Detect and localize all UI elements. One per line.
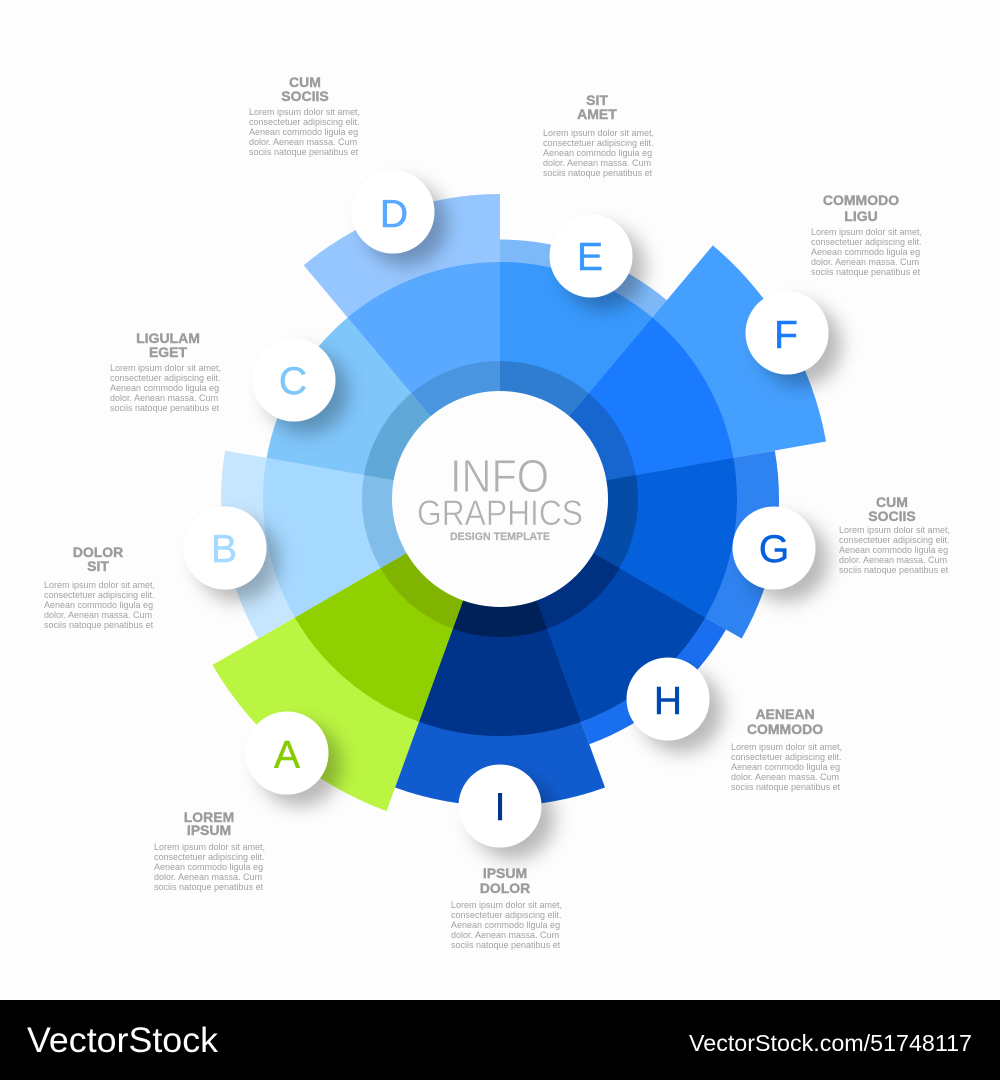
- badge D: [352, 170, 434, 254]
- text block: A lorem ipsum: IPSUM: [187, 822, 231, 838]
- text block: C ligulam eget: dolor. Aenean massa. Cum: [110, 393, 218, 403]
- text block: B dolor sit: consectetuer adipiscing elit.: [44, 590, 155, 600]
- wedge A: [212, 499, 500, 811]
- text block: D cum sociis: dolor. Aenean massa. Cum: [249, 137, 357, 147]
- text block: I ipsum dolor: DOLOR: [480, 880, 530, 896]
- wedge I: [395, 499, 605, 806]
- wedge H: [500, 499, 726, 744]
- text block: F commodo ligu: COMMODO: [823, 192, 899, 208]
- text block: I ipsum dolor: [451, 865, 562, 950]
- text block: D cum sociis: CUM: [289, 74, 321, 90]
- badge D: D: [380, 193, 408, 236]
- text block: F commodo ligu: dolor. Aenean massa. Cum: [811, 257, 919, 267]
- wedge B: [221, 451, 500, 638]
- text block: G cum sociis: SOCIIS: [868, 508, 916, 524]
- wedge E: [500, 239, 667, 499]
- badge I: I: [495, 786, 505, 829]
- text block: F commodo ligu: consectetuer adipiscing elit.: [811, 237, 922, 247]
- text block: A lorem ipsum: LOREM: [184, 809, 234, 825]
- wedge D: [304, 194, 500, 499]
- text block: A lorem ipsum: sociis natoque penatibus et: [154, 882, 264, 892]
- text block: E sit amet: Aenean commodo ligula eg: [543, 148, 652, 158]
- text block: A lorem ipsum: Aenean commodo ligula eg: [154, 862, 263, 872]
- text block: C ligulam eget: consectetuer adipiscing elit.: [110, 373, 221, 383]
- text block: C ligulam eget: Lorem ipsum dolor sit amet,: [110, 363, 221, 373]
- wedge C: [267, 318, 500, 499]
- text block: B dolor sit: [44, 544, 155, 630]
- radial segmented chart: [212, 194, 826, 811]
- text block: E sit amet: SIT: [586, 92, 608, 108]
- text block: D cum sociis: Lorem ipsum dolor sit amet,: [249, 107, 360, 117]
- text block: G cum sociis: dolor. Aenean massa. Cum: [839, 555, 947, 565]
- badge F: F: [774, 314, 798, 357]
- badge B: B: [211, 528, 237, 571]
- text block: I ipsum dolor: Lorem ipsum dolor sit amet,: [451, 900, 562, 910]
- badge E: E: [577, 236, 603, 279]
- center title: DESIGN TEMPLATE: [450, 531, 550, 543]
- text block: E sit amet: dolor. Aenean massa. Cum: [543, 158, 651, 168]
- text block: A lorem ipsum: consectetuer adipiscing elit.: [154, 852, 265, 862]
- text block: C ligulam eget: LIGULAM: [136, 330, 200, 346]
- footer watermark bar: [0, 1000, 1000, 1080]
- text block: D cum sociis: [249, 74, 360, 157]
- center title: [392, 391, 608, 607]
- text block: B dolor sit: Aenean commodo ligula eg: [44, 600, 153, 610]
- center title: GRAPHICS: [417, 494, 583, 533]
- text block: B dolor sit: sociis natoque penatibus et: [44, 620, 154, 630]
- text block: I ipsum dolor: IPSUM: [483, 865, 527, 881]
- text block: H aenean commodo: consectetuer adipiscing elit.: [731, 752, 842, 762]
- text block: H aenean commodo: COMMODO: [747, 721, 823, 737]
- footer watermark bar: VectorStock: [27, 1021, 219, 1060]
- text block: D cum sociis: sociis natoque penatibus et: [249, 147, 359, 157]
- text block: H aenean commodo: dolor. Aenean massa. Cum: [731, 772, 839, 782]
- badge B: [184, 506, 266, 590]
- text block: B dolor sit: dolor. Aenean massa. Cum: [44, 610, 152, 620]
- text block: A lorem ipsum: dolor. Aenean massa. Cum: [154, 872, 262, 882]
- text block: I ipsum dolor: dolor. Aenean massa. Cum: [451, 930, 559, 940]
- text block: B dolor sit: DOLOR: [73, 544, 123, 560]
- badge I: [458, 764, 542, 848]
- text block: E sit amet: AMET: [577, 106, 617, 122]
- badge E: [550, 214, 632, 298]
- text block: E sit amet: consectetuer adipiscing elit.: [543, 138, 654, 148]
- wedge F: [500, 245, 826, 499]
- footer watermark bar: VectorStock.com/51748117: [689, 1030, 972, 1056]
- badge C: C: [279, 360, 307, 403]
- text block: E sit amet: Lorem ipsum dolor sit amet,: [543, 128, 654, 138]
- text block: H aenean commodo: [731, 706, 842, 792]
- text block: I ipsum dolor: consectetuer adipiscing elit.: [451, 910, 562, 920]
- text block: G cum sociis: [839, 494, 950, 575]
- badge H: [626, 658, 710, 740]
- text block: F commodo ligu: Aenean commodo ligula eg: [811, 247, 920, 257]
- text block: D cum sociis: Aenean commodo ligula eg: [249, 127, 358, 137]
- text block: C ligulam eget: [110, 330, 221, 413]
- text block: F commodo ligu: LIGU: [844, 208, 878, 224]
- badge G: G: [759, 528, 789, 571]
- text block: F commodo ligu: [811, 192, 922, 277]
- text block: A lorem ipsum: Lorem ipsum dolor sit amet,: [154, 842, 265, 852]
- wedge G: [500, 451, 779, 638]
- text block: C ligulam eget: sociis natoque penatibus et: [110, 403, 220, 413]
- text block: F commodo ligu: sociis natoque penatibus et: [811, 267, 921, 277]
- text block: C ligulam eget: EGET: [149, 344, 188, 360]
- badge H: H: [654, 680, 682, 723]
- text block: C ligulam eget: Aenean commodo ligula eg: [110, 383, 219, 393]
- text block: B dolor sit: SIT: [87, 558, 109, 574]
- text block: G cum sociis: sociis natoque penatibus et: [839, 565, 949, 575]
- text block: D cum sociis: SOCIIS: [281, 88, 329, 104]
- text block: A lorem ipsum: [154, 809, 265, 892]
- text block: F commodo ligu: Lorem ipsum dolor sit amet,: [811, 227, 922, 237]
- text block: H aenean commodo: Aenean commodo ligula eg: [731, 762, 840, 772]
- text block: H aenean commodo: AENEAN: [755, 706, 815, 722]
- text block: G cum sociis: consectetuer adipiscing elit.: [839, 535, 950, 545]
- badge A: [246, 712, 328, 794]
- text block: E sit amet: sociis natoque penatibus et: [543, 168, 653, 178]
- text block: H aenean commodo: sociis natoque penatibus et: [731, 782, 841, 792]
- text block: G cum sociis: Lorem ipsum dolor sit amet,: [839, 525, 950, 535]
- text block: E sit amet: [543, 92, 654, 178]
- text block: I ipsum dolor: sociis natoque penatibus et: [451, 940, 561, 950]
- text block: B dolor sit: Lorem ipsum dolor sit amet,: [44, 580, 155, 590]
- badge C: [252, 338, 336, 422]
- text block: I ipsum dolor: Aenean commodo ligula eg: [451, 920, 560, 930]
- badge G: [732, 506, 816, 590]
- text block: D cum sociis: consectetuer adipiscing elit.: [249, 117, 360, 127]
- badge A: A: [274, 734, 300, 777]
- center title: INFO: [450, 450, 549, 502]
- text block: G cum sociis: Aenean commodo ligula eg: [839, 545, 948, 555]
- badge F: [746, 292, 828, 374]
- text block: H aenean commodo: Lorem ipsum dolor sit amet,: [731, 742, 842, 752]
- text block: G cum sociis: CUM: [876, 494, 908, 510]
